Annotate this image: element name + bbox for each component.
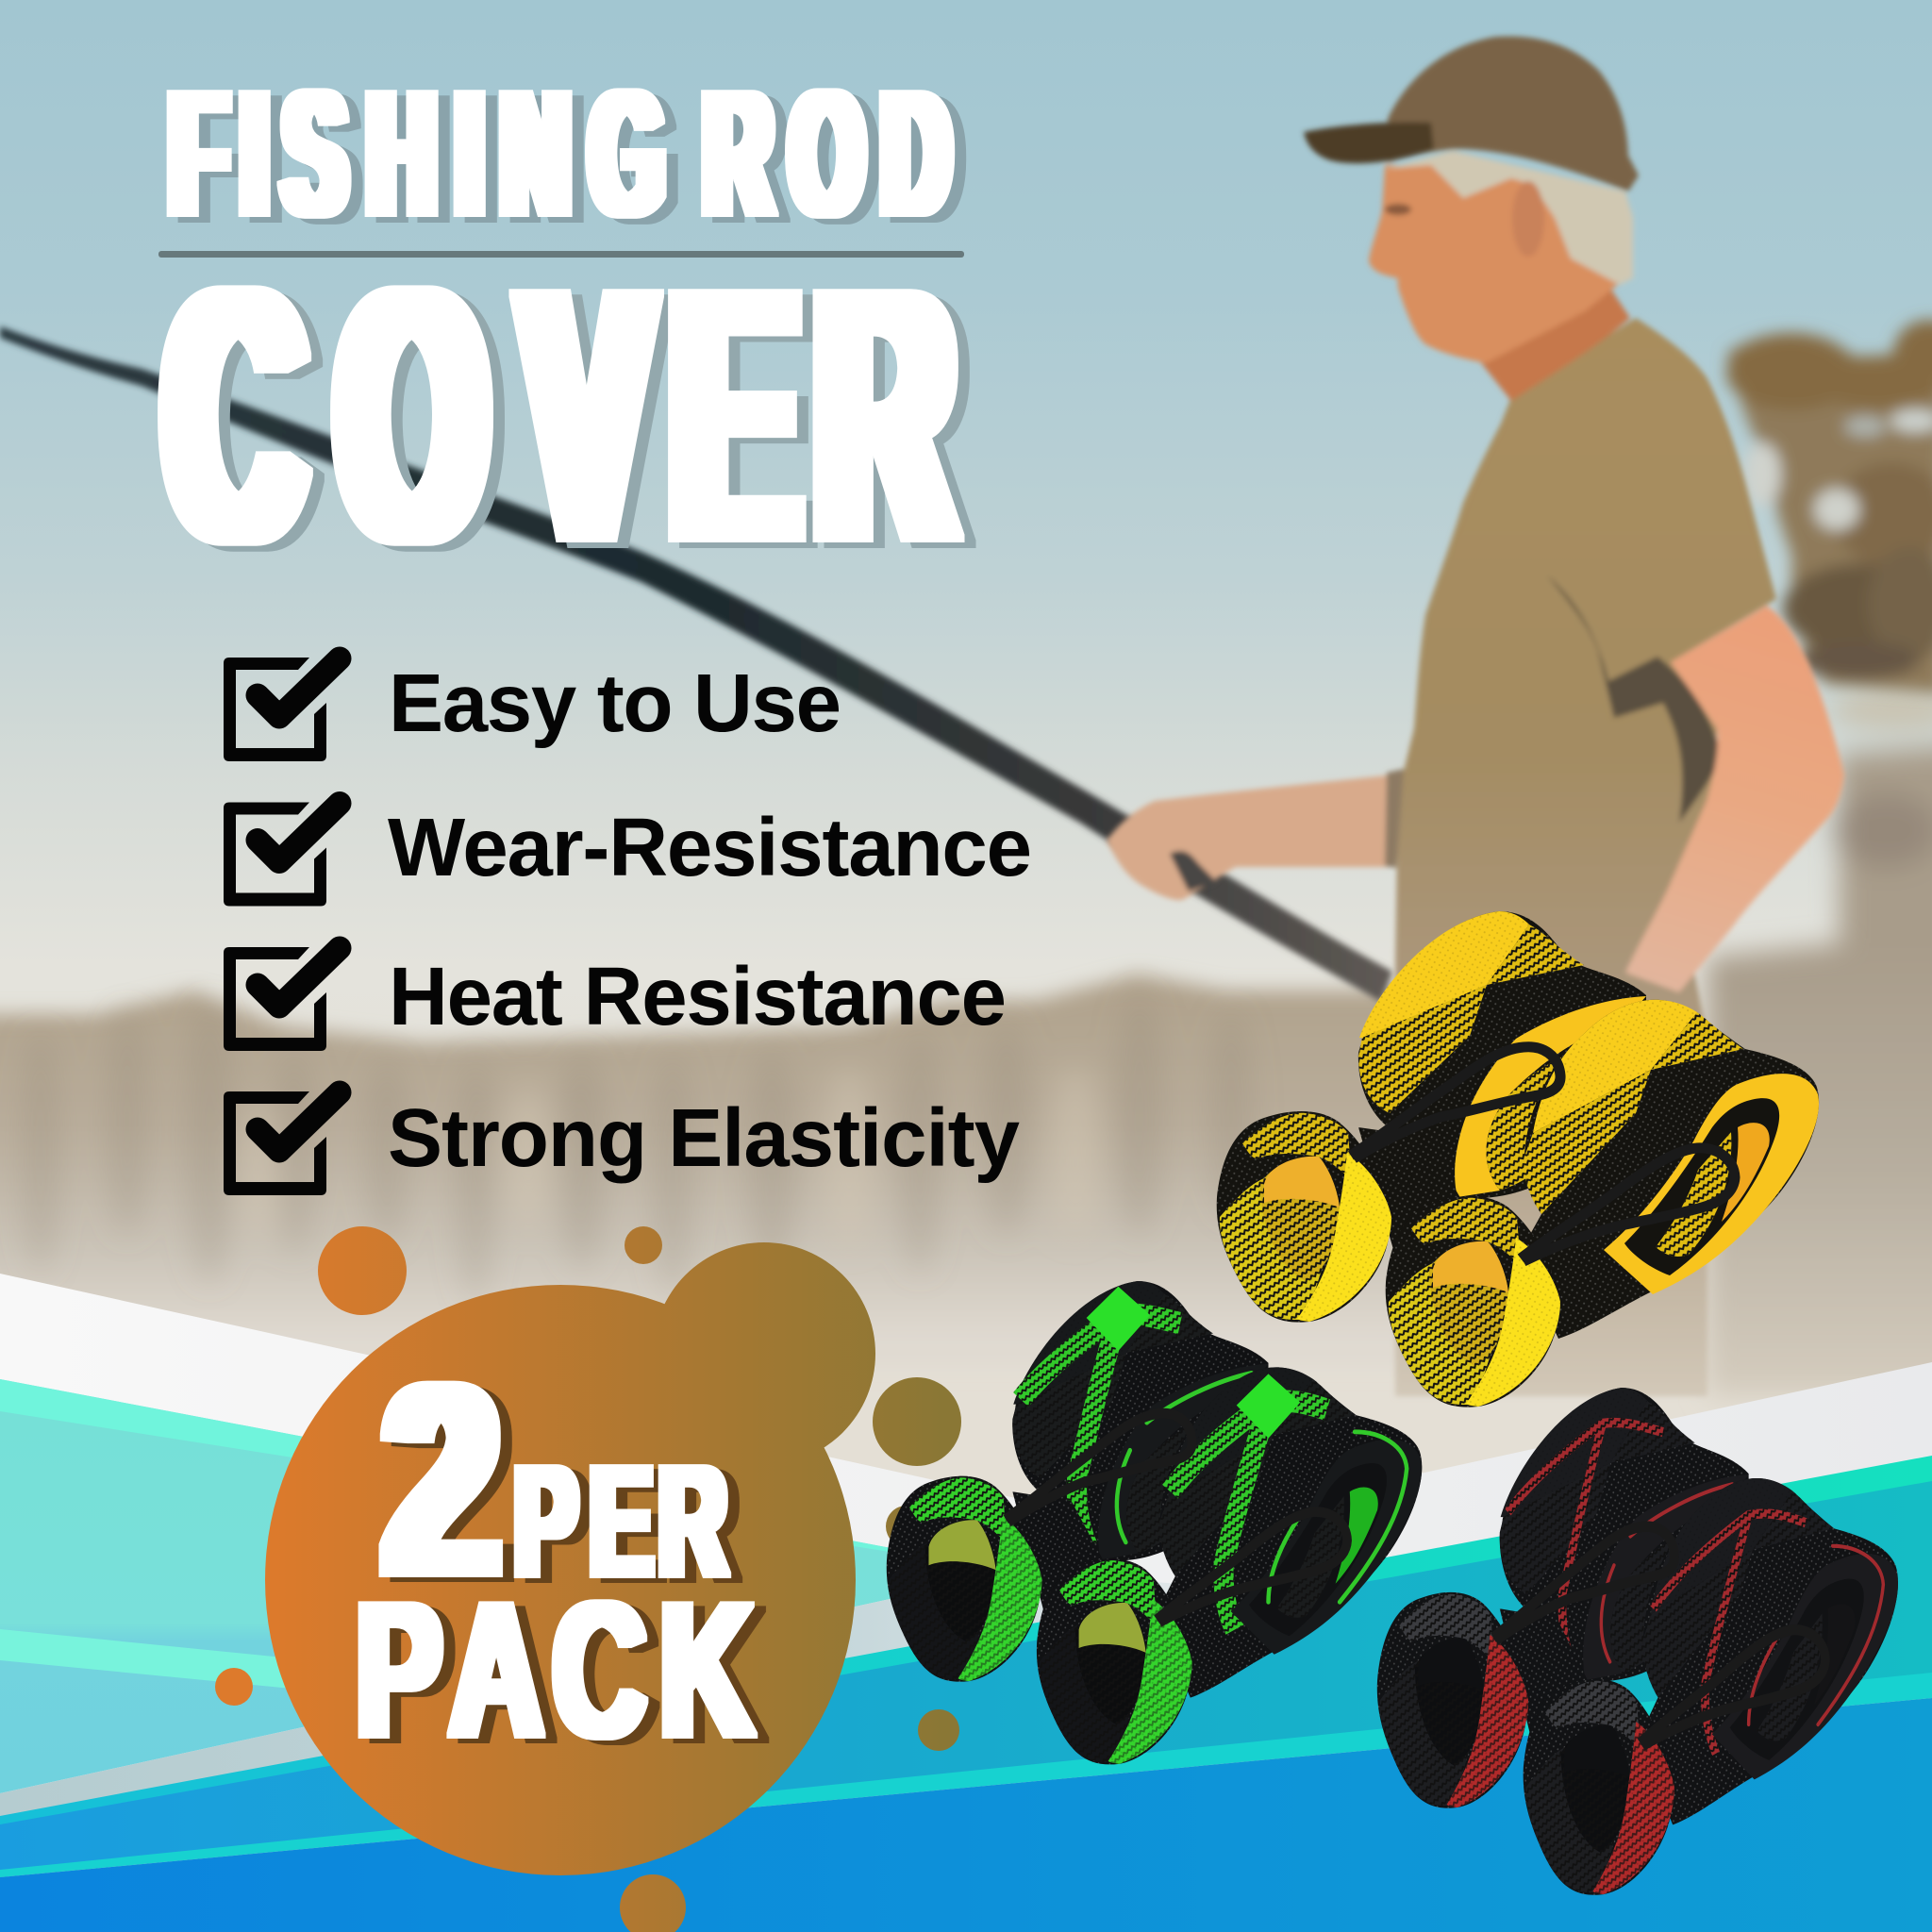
product: yellow rod covers: [1217, 911, 1819, 1407]
checkbox icon 1: [224, 658, 340, 761]
deep blue base: [0, 1698, 1932, 1932]
sleeve edge: [1385, 769, 1404, 868]
badge bubbles: [215, 1226, 961, 1932]
cap visor: [1304, 122, 1434, 163]
divider line: [158, 251, 964, 258]
heading line: FISHING ROD: FISHING ROD: [170, 54, 949, 254]
thin teal lower stripe: [0, 1673, 1932, 1877]
teal main band: [0, 1456, 1932, 1849]
shirt and body: [1395, 318, 1776, 1396]
treeline vertical texture: [22, 991, 1252, 1302]
fishing rod: [0, 326, 1392, 1002]
shirt shadow: [1547, 575, 1722, 823]
front arm and hand: [1107, 774, 1395, 900]
heading line: COVER: COVER: [167, 217, 952, 616]
tree behind fisherman: [1707, 320, 1932, 1396]
feature text: Heat Resistance: Heat Resistance: [389, 951, 1007, 1042]
rod grip in hand: [1170, 851, 1217, 891]
fisherman: [1107, 36, 1844, 1396]
checkbox icon 4: [224, 1091, 340, 1195]
rear arm: [1625, 606, 1844, 992]
product: red rod covers: [1377, 1388, 1898, 1895]
mid blue wave: [0, 1481, 1932, 1877]
feature text: Wear-Resistance: Wear-Resistance: [388, 802, 1032, 893]
light teal panel: [0, 1379, 1015, 1793]
feature list: [224, 658, 1032, 1195]
product: green rod covers: [887, 1281, 1422, 1764]
hair: [1385, 151, 1633, 285]
lower foliage mass: [1707, 689, 1932, 1396]
bright teal middle stripe: [0, 1629, 311, 1690]
grey wedge: [0, 1572, 1321, 1821]
white swoosh band: [0, 1274, 1932, 1849]
cap: [1388, 36, 1639, 192]
badge text PER: PER: [514, 1434, 726, 1609]
bright teal upper stripe: [0, 1379, 1015, 1572]
upper foliage: [1726, 320, 1932, 693]
feature text: Easy to Use: Easy to Use: [389, 658, 841, 749]
badge text PACK: PACK: [356, 1563, 753, 1776]
badge: 2 per pack: [215, 1226, 961, 1932]
feature text: Strong Elasticity: Strong Elasticity: [388, 1092, 1020, 1184]
neck: [1472, 264, 1630, 401]
eye shadow: [1385, 204, 1411, 215]
distant treeline: [0, 974, 1415, 1368]
badge number 2: 2: [385, 1328, 498, 1631]
checkbox icon 2: [224, 802, 340, 906]
checkbox icon 3: [224, 947, 340, 1051]
ear: [1512, 181, 1544, 257]
face: [1369, 165, 1625, 363]
